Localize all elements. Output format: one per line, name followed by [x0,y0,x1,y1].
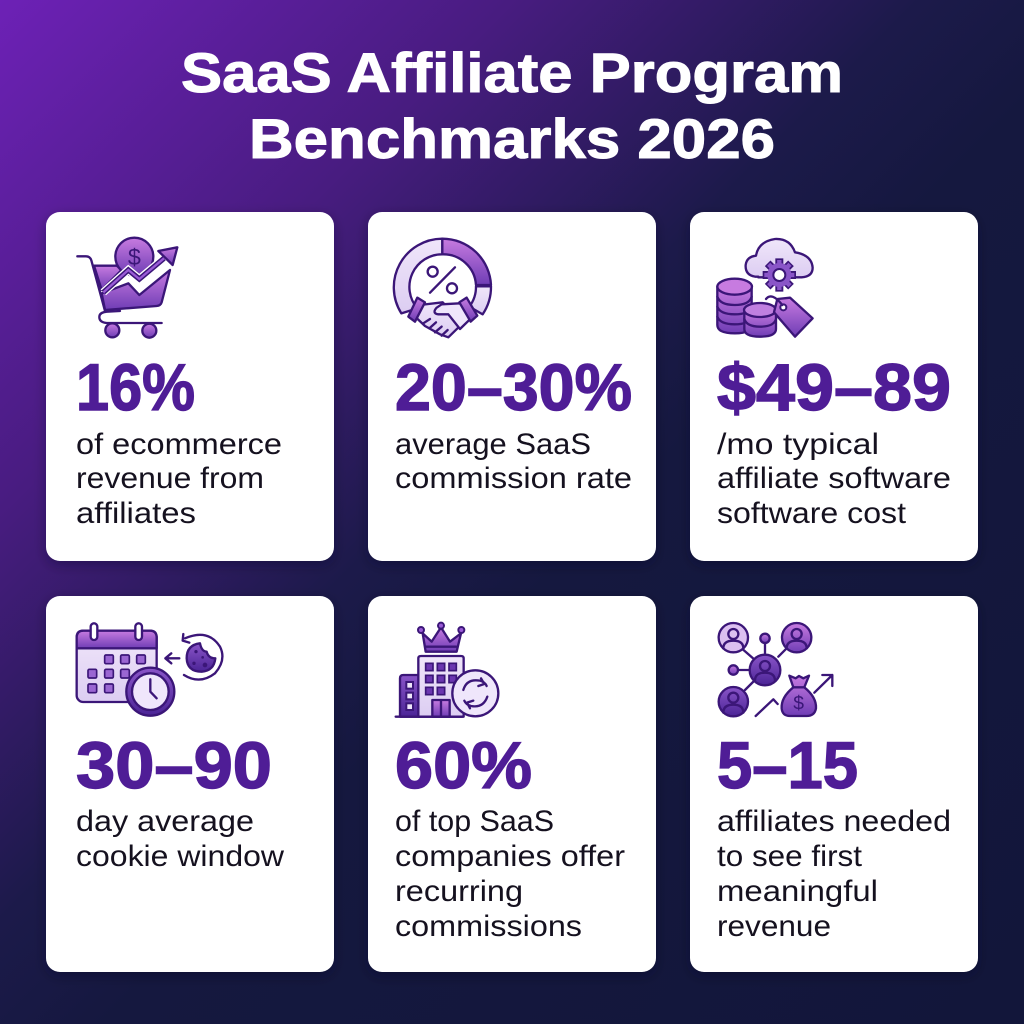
stat: $49–89: $49–89 [717,350,951,424]
description: commissions [395,910,582,943]
description: day average [76,805,254,838]
description: revenue from [76,462,264,495]
icon: shopping cart with rising arrow: $ [128,244,141,270]
icon: affiliate network and money bag: $ [793,693,804,714]
description: average SaaS [395,428,591,461]
title: SaaS Affiliate Program [181,41,843,104]
icon: affiliate network and money bag [719,623,832,716]
icon: percent ring and handshake [394,239,491,337]
stat: 60%: 60% [395,728,532,802]
description [76,805,284,873]
description: affiliate software [717,462,951,495]
icon: shopping cart with rising arrow [77,238,177,338]
description: software cost [717,497,907,530]
stat: 16%: 16% [76,350,195,424]
description: of ecommerce [76,428,282,461]
panel: commission rate [368,212,656,561]
description: /mo typical [717,428,879,461]
description [76,428,282,530]
description: recurring [395,875,523,908]
description [717,428,951,530]
panel: software cost [690,212,978,561]
description: affiliates [76,497,196,530]
description [395,805,625,943]
icon: crowned building with recurring arrows [396,623,498,717]
description [717,805,951,943]
description: to see first [717,840,863,873]
icon: cloud, gear, coins and tag [717,239,813,337]
panel: cookie window [46,596,334,972]
description: commission rate [395,462,632,495]
panel: ecommerce revenue [46,212,334,561]
stat: 30–90: 30–90 [76,728,272,802]
panel: recurring commissions [368,596,656,972]
title: Benchmarks 2026 [249,107,775,170]
stat: 20–30%: 20–30% [395,350,632,424]
description [395,428,632,495]
description: companies offer [395,840,625,873]
panel: affiliates needed [690,596,978,972]
description: revenue [717,910,831,943]
description: cookie window [76,840,284,873]
description: meaningful [717,875,878,908]
description: affiliates needed [717,805,951,838]
stat: 5–15: 5–15 [717,728,858,802]
title [181,41,843,170]
icon: calendar, clock and cookie [77,623,222,716]
description: of top SaaS [395,805,554,838]
